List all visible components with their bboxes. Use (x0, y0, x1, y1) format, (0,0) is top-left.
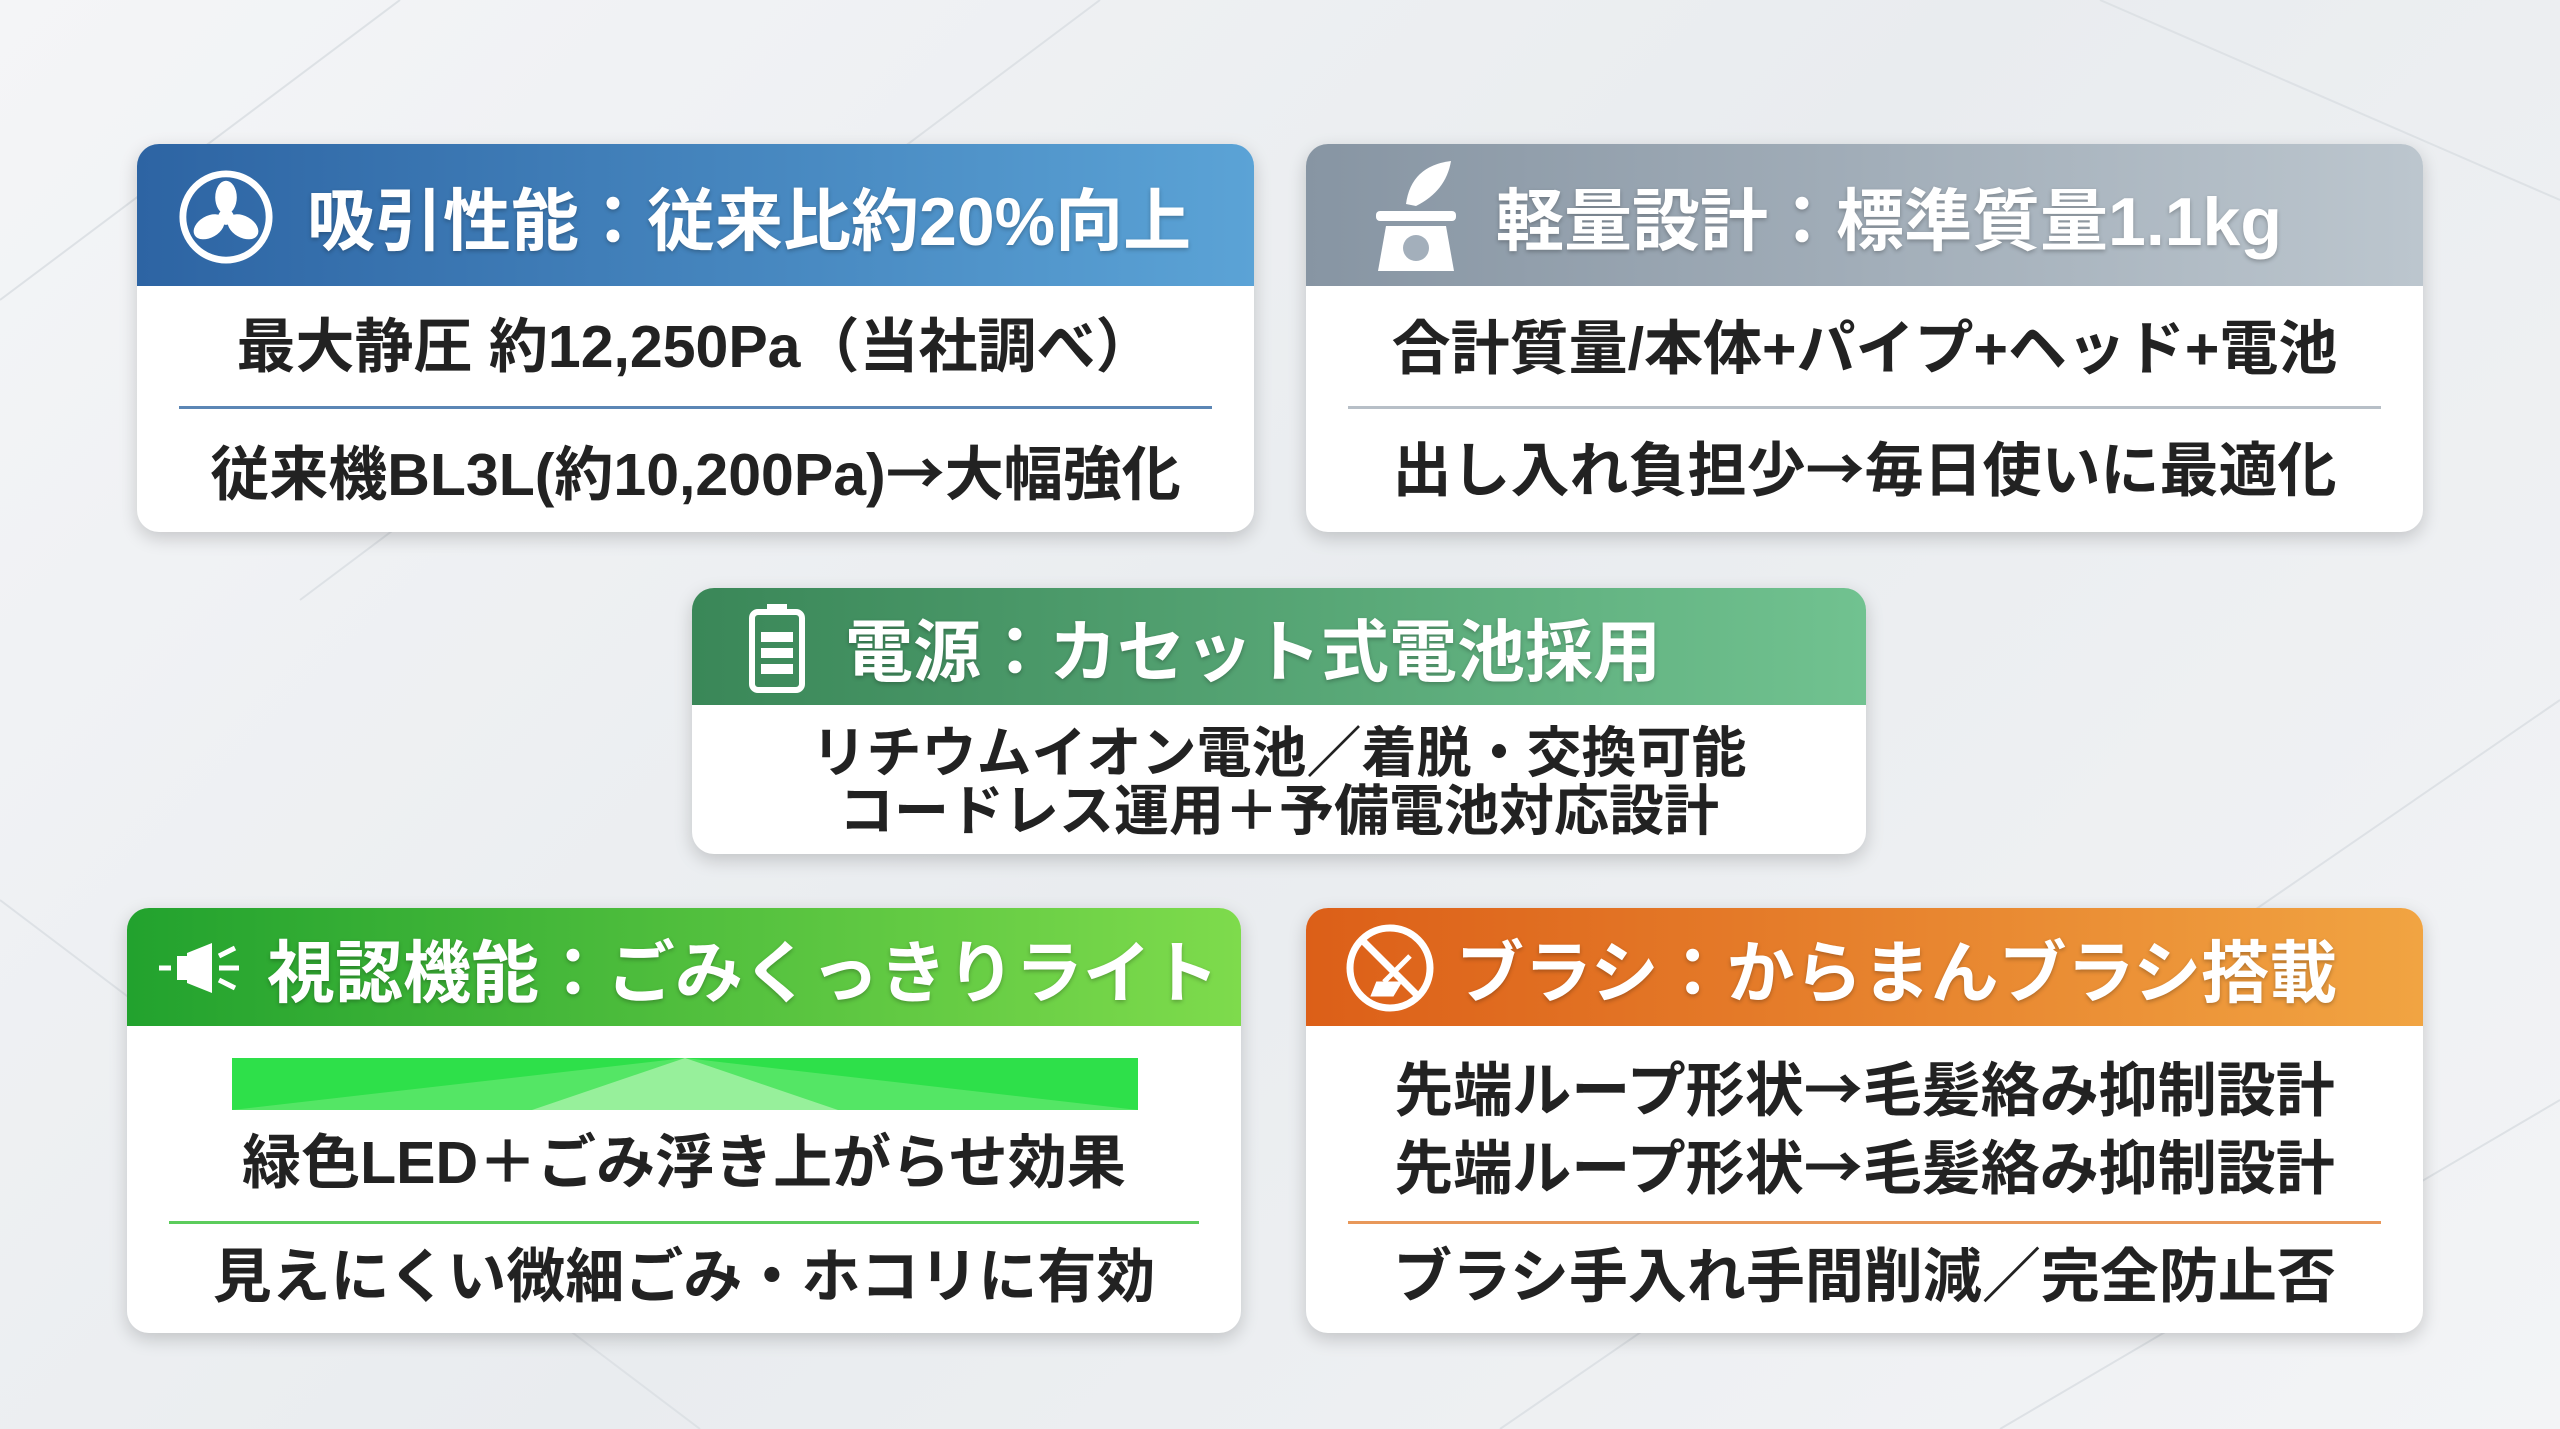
heading: power (692, 588, 1866, 705)
text: daily use: 出し入れ負担少→毎日使いに最適化 (1392, 423, 2337, 508)
text: maintenance: ブラシ手入れ手間削減／完全防止否 (1393, 1244, 2336, 1310)
text: green LED: 緑色LED＋ごみ浮き上がらせ効果 (242, 1130, 1126, 1196)
heading: brush: ブラシ：からまんブラシ搭載 (1456, 936, 2337, 1012)
icon: battery (749, 604, 805, 693)
text: battery details: リチウムイオン電池／着脱・交換可能 (811, 722, 1746, 784)
panel: suction (137, 144, 1254, 532)
heading: brush (1306, 908, 2423, 1026)
text: total weight: 合計質量/本体+パイプ+ヘッド+電池 (1392, 316, 2337, 382)
panel: brush: 先端ループ形状→毛髪絡み抑制設計 (1394, 1121, 2335, 1206)
panel: brush (1306, 908, 2423, 1333)
chart: light beam bar (232, 1058, 1138, 1110)
heading: light: 視認機能：ごみくっきりライト (267, 936, 1219, 1012)
panel: weight (1306, 144, 2423, 532)
icon: fan (179, 170, 273, 264)
text: fine dust: 見えにくい微細ごみ・ホコリに有効 (213, 1244, 1155, 1310)
panel: light (127, 908, 1241, 1333)
panel: power: コードレス運用＋予備電池対応設計 (839, 780, 1719, 842)
icon: scale with feather (1376, 161, 1456, 271)
text: previous model: 従来機BL3L(約10,200Pa)→大幅強化 (210, 427, 1181, 512)
panel: power (692, 588, 1866, 854)
text: loop shape: 先端ループ形状→毛髪絡み抑制設計 (1394, 1043, 2335, 1128)
heading: suction: 吸引性能：従来比約20%向上 (307, 184, 1191, 260)
icon: light (159, 943, 239, 993)
heading: suction (137, 144, 1254, 286)
heading: weight: 軽量設計：標準質量1.1kg (1496, 184, 2282, 260)
heading: weight (1306, 144, 2423, 286)
heading: power: 電源：カセット式電池採用 (845, 615, 1661, 691)
heading: light (127, 908, 1241, 1026)
icon: no hair brush (1346, 924, 1434, 1012)
text: max pressure: 最大静圧 約12,250Pa（当社調べ） (236, 314, 1154, 380)
